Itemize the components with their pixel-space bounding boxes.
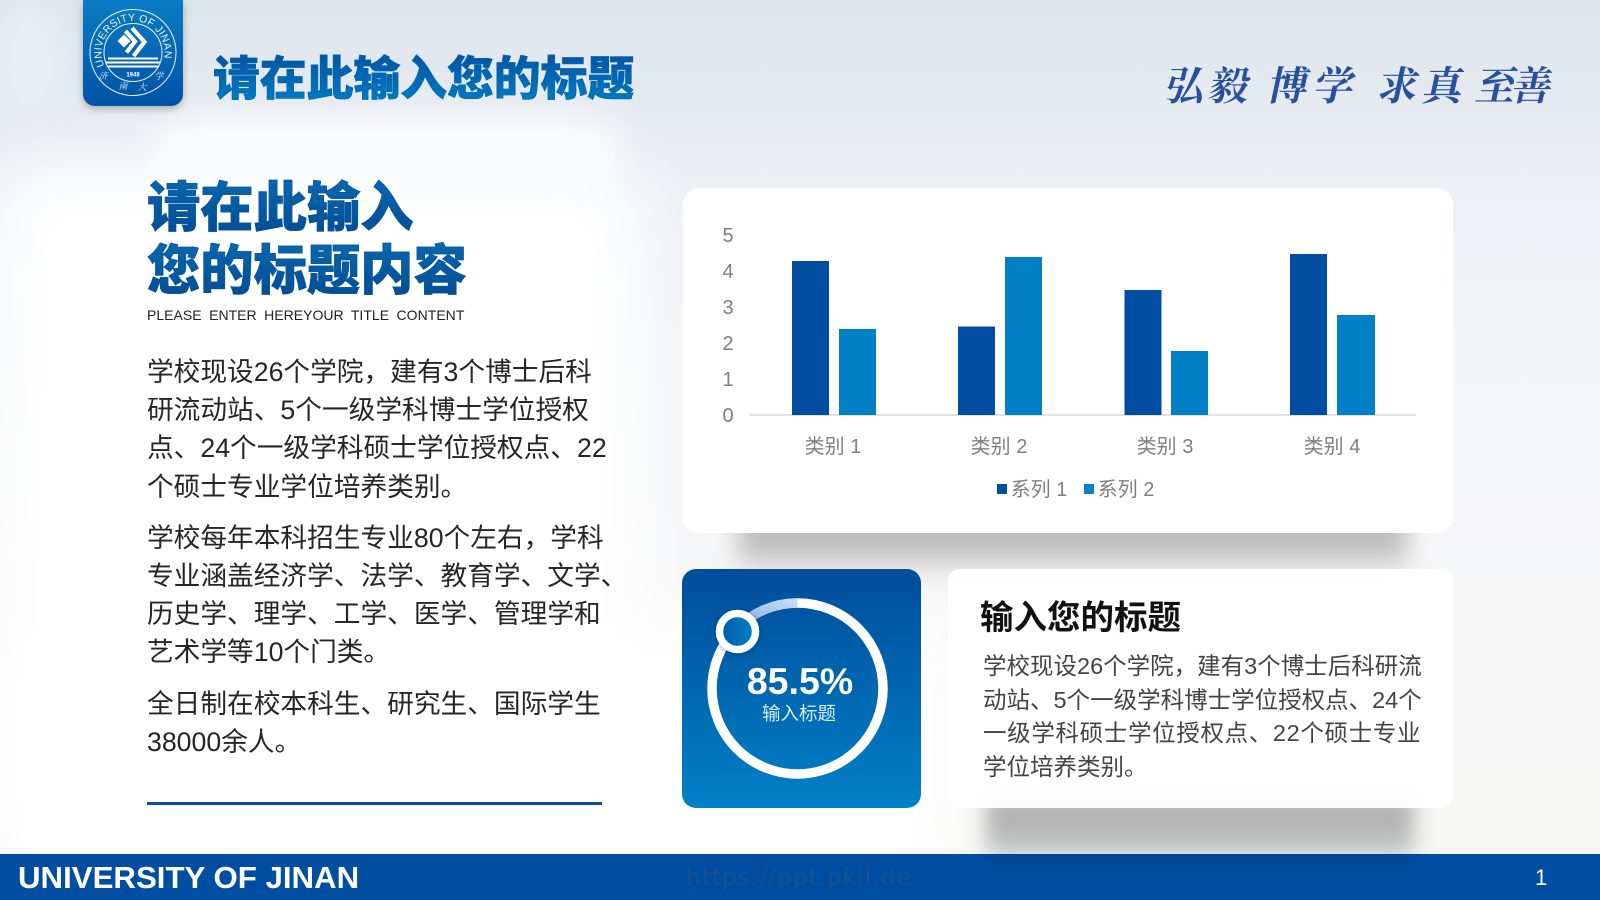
left heading: 请在此输入 bbox=[147, 179, 413, 238]
motto: 善 bbox=[1507, 54, 1560, 112]
footer bar bbox=[0, 854, 1600, 900]
bar chart: 系列 1 bbox=[1011, 478, 1067, 501]
page number: 1 bbox=[1535, 865, 1547, 890]
body text: 艺术学等10个门类。 bbox=[147, 637, 390, 667]
body text: 点、24个一级学科硕士学位授权点、22 bbox=[147, 433, 607, 463]
body text: 学校每年本科招生专业80个左右，学科 bbox=[147, 523, 604, 553]
card heading: 输入您的标题 bbox=[980, 600, 1181, 637]
bar chart: 4 bbox=[722, 261, 734, 283]
card text bbox=[983, 653, 1422, 780]
logo badge bbox=[78, 0, 188, 114]
motto: 毅 bbox=[1204, 54, 1257, 112]
left heading: 您的标题内容 bbox=[147, 242, 467, 301]
body text: 38000余人。 bbox=[147, 727, 301, 757]
logo badge: 大 bbox=[137, 80, 147, 93]
panel: blue stat card bbox=[682, 569, 921, 808]
progress ring bbox=[707, 598, 888, 779]
left heading bbox=[147, 177, 467, 303]
body text: 专业涵盖经济学、法学、教育学、文学、 bbox=[147, 561, 627, 591]
text card shadow bbox=[986, 796, 1414, 860]
motto bbox=[1160, 54, 1560, 112]
bar chart: 0 bbox=[722, 405, 734, 427]
bar chart: 5 bbox=[722, 225, 734, 247]
stat value: 85.5% bbox=[747, 660, 853, 702]
motto: 弘 bbox=[1160, 54, 1216, 112]
stat label: 输入标题 bbox=[762, 703, 836, 724]
card text: 学位培养类别。 bbox=[983, 754, 1148, 780]
bar chart: 类别 3 bbox=[1137, 435, 1193, 458]
bar chart: 类别 1 bbox=[805, 435, 861, 458]
body text: 研流动站、5个一级学科博士学位授权 bbox=[147, 395, 589, 425]
title: 请在此输入您的标题 bbox=[213, 53, 634, 105]
logo badge: 学 bbox=[154, 69, 165, 82]
body text: 学校现设26个学院，建有3个博士后科 bbox=[147, 357, 592, 387]
watermark: https://ppt.pkll.de bbox=[686, 863, 912, 891]
logo chevrons bbox=[118, 28, 144, 56]
body text bbox=[147, 357, 627, 757]
bar chart bbox=[722, 225, 1416, 501]
chart card shadow bbox=[738, 516, 1408, 572]
panel: text card bbox=[948, 569, 1453, 808]
motto: 博 bbox=[1263, 54, 1316, 112]
bar chart: 系列 2 bbox=[1098, 478, 1154, 501]
logo badge: 南 bbox=[118, 79, 129, 92]
left subtitle: PLEASE ENTER HEREYOUR TITLE CONTENT bbox=[147, 307, 464, 323]
logo badge: UNIVERSITY OF JINAN bbox=[94, 14, 172, 68]
bar chart: 类别 2 bbox=[971, 435, 1027, 458]
motto: 求 bbox=[1373, 54, 1426, 112]
divider line bbox=[147, 802, 602, 805]
motto: 至 bbox=[1471, 54, 1524, 112]
card text: 一级学科硕士学位授权点、22个硕士专业 bbox=[983, 720, 1421, 746]
card text: 学校现设26个学院，建有3个博士后科研流 bbox=[983, 653, 1422, 679]
bar chart: 3 bbox=[722, 297, 734, 319]
card text: 动站、5个一级学科博士学位授权点、24个 bbox=[983, 687, 1422, 713]
logo badge: 1948 bbox=[126, 72, 140, 78]
motto: 真 bbox=[1418, 54, 1476, 112]
footer brand: UNIVERSITY OF JINAN bbox=[18, 860, 359, 895]
body text: 历史学、理学、工学、医学、管理学和 bbox=[147, 599, 601, 629]
body text: 个硕士专业学位培养类别。 bbox=[147, 472, 467, 502]
bar chart: 2 bbox=[722, 333, 734, 355]
body text: 全日制在校本科生、研究生、国际学生 bbox=[147, 689, 601, 719]
bar chart: 类别 4 bbox=[1304, 435, 1360, 458]
panel: chart bbox=[683, 188, 1453, 533]
motto: 学 bbox=[1309, 54, 1362, 112]
logo badge: 济 bbox=[98, 69, 109, 82]
bar chart: 1 bbox=[722, 369, 734, 391]
